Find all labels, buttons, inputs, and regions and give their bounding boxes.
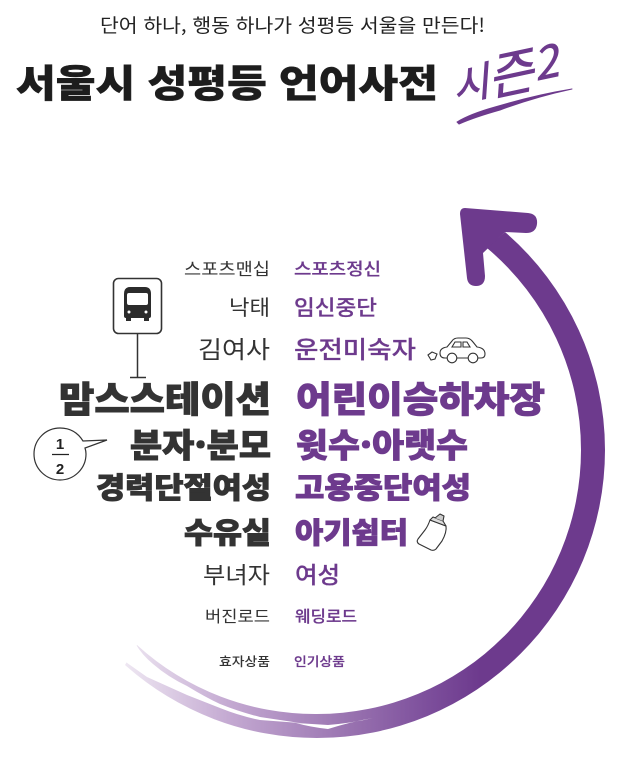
circular arrow [123,208,605,738]
left column: words to replace: 낙태 [229,292,270,322]
subtitle: 단어 하나, 행동 하나가 성평등 서울을 만든다! [100,11,485,38]
right column: replacement words: 어린이승하차장 [296,371,545,423]
left column: words to replace: 스포츠맨십 [184,255,270,280]
right column: replacement words: 여성 [295,556,340,590]
season 2 handwritten mark [454,22,572,124]
left column: words to replace: 맘스스테이션 [59,371,271,423]
right column: replacement words: 인기상품 [294,651,345,670]
left column: words to replace [59,255,271,670]
left column: words to replace: 김여사 [198,330,270,365]
left column: words to replace: 버진로드 [205,603,270,627]
right column: replacement words: 임신중단 [294,292,377,322]
icon: one-half speech bubble: 1 [56,436,64,453]
right column: replacement words [294,255,545,670]
left column: words to replace: 경력단절여성 [96,465,271,507]
title: 서울시 성평등 언어사전 [16,53,438,108]
right column: replacement words: 윗수·아랫수 [296,419,468,467]
left column: words to replace: 부녀자 [203,556,270,590]
right column: replacement words: 아기쉼터 [295,510,408,552]
left column: words to replace: 효자상품 [219,651,270,670]
left column: words to replace: 수유실 [184,510,271,552]
season 2 handwritten mark: 2 [535,23,564,94]
right column: replacement words: 웨딩로드 [295,603,357,627]
icon: one-half speech bubble [34,428,107,480]
brush gaps [123,643,300,723]
arrow shaft and brush tail [125,232,605,738]
left column: words to replace: 분자·분모 [130,419,271,467]
icon: one-half speech bubble: 2 [56,461,64,478]
right column: replacement words: 스포츠정신 [294,255,381,280]
right column: replacement words: 운전미숙자 [294,330,416,365]
arrow head [460,208,537,286]
icon: bus stop sign [114,278,162,378]
season 2 handwritten mark: 시 [454,47,494,114]
season 2 handwritten mark: 즌 [490,27,540,112]
icon: baby bottle [417,514,446,550]
right column: replacement words: 고용중단여성 [295,465,471,507]
icon: car with exhaust puff [428,338,485,363]
